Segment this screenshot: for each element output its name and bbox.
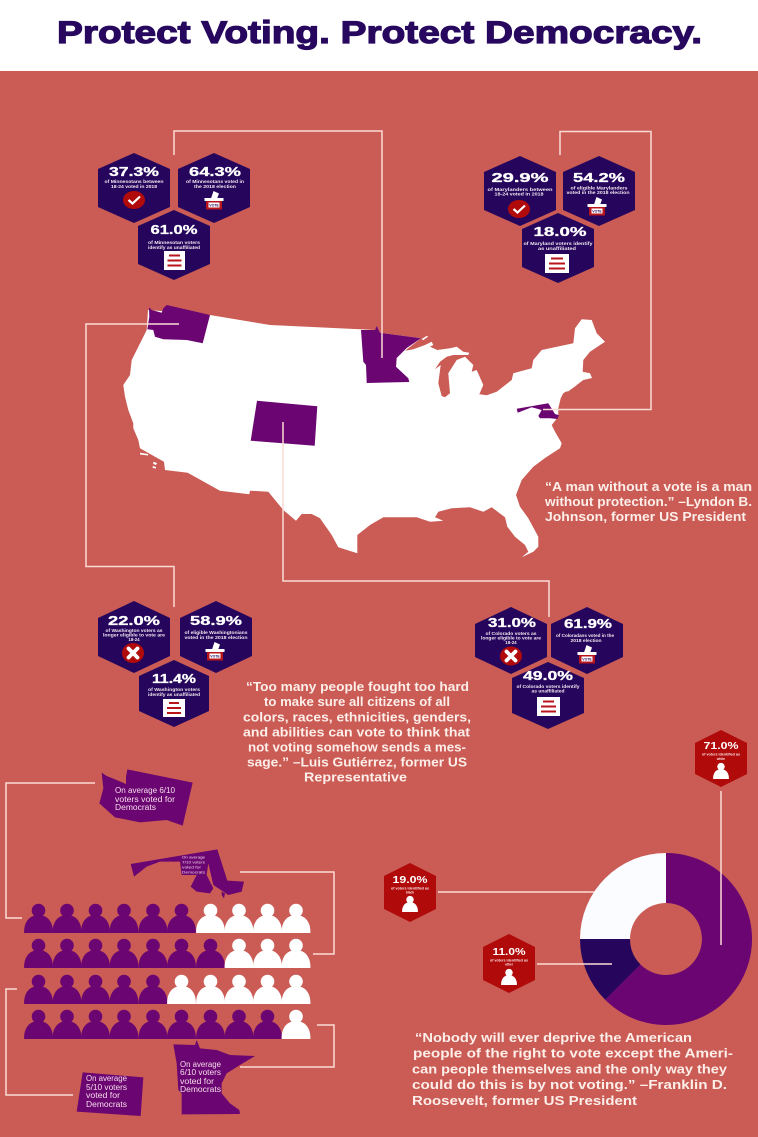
quote: Luis Gutiérrez: sage.” –Luis Gutiérrez, former US	[247, 754, 467, 770]
hexagon: 71.0% white voters: 71.0%	[704, 741, 739, 752]
hexagon: 11.4%: of Washington voters	[148, 687, 201, 692]
row: Minnesota 9 of 10	[24, 1010, 310, 1039]
hexagon: 11.0% other voters: 11.0%	[492, 947, 526, 958]
panel: Colorado stats	[475, 607, 623, 729]
hexagon: 61.9%	[551, 607, 623, 674]
hexagon: 18.0%: 18.0%	[534, 224, 587, 239]
hexagon: 19.0% black voters: of voters identified as	[391, 886, 429, 890]
bracket: Maryland to row 2	[240, 872, 334, 954]
hexagon: 54.2%: VOTE	[592, 210, 602, 214]
hexagon: 64.3%: of Minnesotans voted in	[186, 179, 244, 184]
quote: Franklin D. Roosevelt	[412, 1030, 733, 1108]
panel: Maryland stats	[484, 156, 635, 283]
hexagon: 64.3%: the 2018 election	[194, 184, 236, 189]
hexagon: 11.4%: identify as unaffiliated	[148, 692, 200, 697]
state callout: Washington: On average 6/10	[115, 786, 176, 795]
hexagon: 22.0%: 18-24	[128, 637, 140, 642]
row: Maryland 7 of 10	[24, 939, 310, 968]
connector: Minnesota	[174, 131, 382, 358]
hexagon: 61.0%	[138, 210, 210, 280]
connector: Maryland	[543, 132, 651, 410]
state callout: Minnesota	[173, 1040, 255, 1114]
quote: Luis Gutiérrez: not voting somehow sends a mes-	[248, 740, 466, 754]
row: Washington 6 of 10	[24, 904, 310, 933]
quote: Luis Gutiérrez	[243, 679, 471, 784]
hexagon: 54.2%: voted in the 2018 election	[566, 190, 630, 195]
quote: Luis Gutiérrez: and abilities can vote to think that	[243, 724, 471, 740]
connector: 19%	[438, 891, 594, 893]
hexagon: 61.9%: VOTE	[582, 658, 592, 662]
hexagon: 71.0% white voters: white	[716, 757, 725, 761]
quote: Luis Gutiérrez: Representative	[304, 770, 407, 784]
hexagon: 61.0%: identify as unaffiliated	[148, 245, 200, 250]
hexagon: 64.3%: VOTE	[209, 204, 219, 208]
segment: black voters	[580, 853, 666, 939]
hexagon: 58.9%: of eligible Washingtonians	[184, 630, 248, 635]
quote: Luis Gutiérrez: to make sure all citizens of all	[264, 694, 450, 709]
hexagon: 58.9%: voted in the 2018 election	[184, 635, 248, 640]
quote: Luis Gutiérrez: colors, races, ethnicities, genders,	[243, 710, 471, 724]
hexagon: 61.9%: 2018 election	[570, 638, 602, 643]
state callout: Minnesota: voted for	[180, 1077, 214, 1086]
state callout: Colorado: voted for	[86, 1091, 120, 1100]
quote: Franklin D. Roosevelt: could do this is by not voting.” –Franklin D.	[412, 1077, 727, 1092]
hexagon: 61.9%: of Coloradans voted in the	[556, 633, 615, 638]
state callout: Colorado: On average	[86, 1074, 128, 1083]
hexagon: 22.0%: 22.0%	[108, 613, 161, 628]
hexagon: 71.0% white voters	[695, 730, 747, 787]
segment: other voters	[580, 939, 640, 1000]
hexagon: 61.0%: of Minnesotan voters	[148, 240, 201, 245]
hexagon: 19.0% black voters: 19.0%	[392, 875, 428, 886]
bracket: Minnesota to row 4	[240, 1025, 334, 1067]
state callout: Minnesota: 6/10 voters	[180, 1068, 221, 1077]
hexagon: 37.3%: of Minnesotans between	[104, 179, 164, 184]
hexagon: 49.0%: of Colorado voters identify	[516, 684, 580, 689]
hexagon: 54.2%	[563, 156, 635, 226]
state: Minnesota	[361, 326, 421, 383]
state callout: Maryland: 7/10 voters	[182, 860, 205, 864]
hexagon: 58.9%	[180, 601, 252, 673]
quote: Lyndon B. Johnson: “A man without a vote is a man	[545, 479, 752, 494]
quote: Luis Gutiérrez: “Too many people fought too hard	[246, 679, 469, 694]
hexagon: 22.0%: of Washington voters as	[106, 628, 163, 633]
state callout: Washington	[99, 769, 193, 826]
title banner: Protect Voting. Protect Democracy.	[57, 14, 702, 50]
people chart: voters for Democrats	[24, 904, 310, 1039]
hexagon: 54.2%: of eligible Marylanders	[570, 186, 628, 190]
connector: 11%	[537, 963, 612, 965]
hexagon: 37.3%: 18-24 voted in 2018	[111, 184, 158, 189]
state callout: Colorado: 5/10 voters	[86, 1083, 127, 1092]
hexagon: 58.9%: 58.9%	[190, 613, 243, 628]
connector: 71%	[720, 791, 722, 945]
hexagon: 19.0% black voters: black	[406, 890, 414, 894]
bracket: Washington to row 1	[6, 783, 95, 918]
hexagon: 11.0% other voters: other	[505, 962, 514, 966]
hexagon: 22.0%: longer eligible to vote are	[103, 632, 166, 638]
hexagon: 31.0%	[475, 607, 547, 674]
quote: Franklin D. Roosevelt: “Nobody will ever deprive the American	[415, 1030, 692, 1045]
hexagon: 18.0%	[522, 213, 594, 283]
quote: Franklin D. Roosevelt: Roosevelt, former US President	[412, 1093, 638, 1108]
hexagon: 61.0%: 61.0%	[150, 222, 198, 237]
hexagon: 58.9%: VOTE	[210, 654, 220, 658]
hexagon: 31.0%: 18-24	[505, 640, 517, 645]
US map	[123, 305, 605, 557]
connector: Washington	[86, 324, 179, 607]
state callout: Maryland: On average	[182, 854, 205, 860]
state callout: Maryland: Democrats	[182, 870, 205, 874]
hexagon: 49.0%	[512, 662, 584, 729]
hexagon: 64.3%: 64.3%	[189, 164, 242, 179]
hexagon: 11.0% other voters	[483, 934, 535, 993]
hexagon: 22.0%	[98, 601, 170, 673]
hexagon: 31.0%: longer eligible to vote are	[481, 636, 542, 640]
quote: Lyndon B. Johnson	[544, 479, 752, 524]
state callout: Minnesota: On average	[180, 1060, 222, 1069]
title banner	[0, 0, 758, 71]
state: Colorado	[251, 401, 317, 446]
state callout: Washington: Democrats	[115, 803, 156, 812]
hexagon: 37.3%	[98, 153, 170, 223]
state: Maryland	[517, 403, 559, 419]
quote: Franklin D. Roosevelt: can people themselves and the only way they	[412, 1062, 728, 1076]
hexagon: 18.0%: as unaffiliated	[538, 246, 576, 251]
quote: Franklin D. Roosevelt: people of the right to vote except the Ameri-	[413, 1046, 733, 1060]
hexagon: 49.0%: as unaffiliated	[532, 688, 565, 694]
hexagon: 64.3%	[178, 153, 250, 223]
hexagon: 18.0%: of Maryland voters identify	[524, 241, 593, 246]
hexagon: 61.9%: 61.9%	[564, 616, 613, 631]
hexagon: 49.0%: 49.0%	[523, 668, 574, 683]
panel: Washington stats	[98, 601, 252, 727]
hexagon: 54.2%: 54.2%	[573, 170, 626, 185]
hexagon: 29.9%: 29.9%	[492, 170, 549, 185]
state callout: Colorado	[77, 1072, 143, 1116]
donut chart	[580, 853, 752, 1025]
segment: white voters	[605, 853, 752, 1025]
hexagon: 19.0% black voters	[384, 863, 436, 922]
hexagon: 29.9%: of Marylanders between	[488, 187, 553, 192]
state callout: Maryland: voted for	[182, 864, 202, 870]
quote: Lyndon B. Johnson: without protection.” –Lyndon B.	[544, 494, 752, 509]
hexagon: 29.9%	[484, 156, 556, 226]
hexagon: 11.4%: 11.4%	[152, 671, 197, 686]
hexagon: 37.3%: 37.3%	[109, 164, 160, 179]
bracket: Colorado to row 3	[6, 989, 73, 1095]
hexagon: 11.4%	[139, 660, 209, 727]
row: Colorado 5 of 10	[24, 975, 310, 1004]
hexagon: 31.0%: 31.0%	[488, 615, 537, 630]
hexagon: 71.0% white voters: of voters identified as	[702, 752, 740, 756]
quote: Lyndon B. Johnson: Johnson, former US President	[545, 509, 747, 524]
state callout: Colorado: Democrats	[86, 1100, 127, 1109]
state: Washington	[147, 305, 210, 343]
hexagon: 31.0%: of Colorado voters as	[486, 631, 537, 636]
connector: Colorado	[283, 422, 549, 617]
hexagon: 29.9%: 18-24 voted in 2018	[494, 192, 544, 196]
state callout: Minnesota: Democrats	[180, 1085, 221, 1094]
state callout: Maryland	[131, 849, 244, 898]
panel: Minnesota stats	[98, 153, 250, 280]
hexagon: 11.0% other voters: of voters identified as	[490, 958, 528, 962]
state callout: Washington: voters voted for	[115, 795, 175, 804]
